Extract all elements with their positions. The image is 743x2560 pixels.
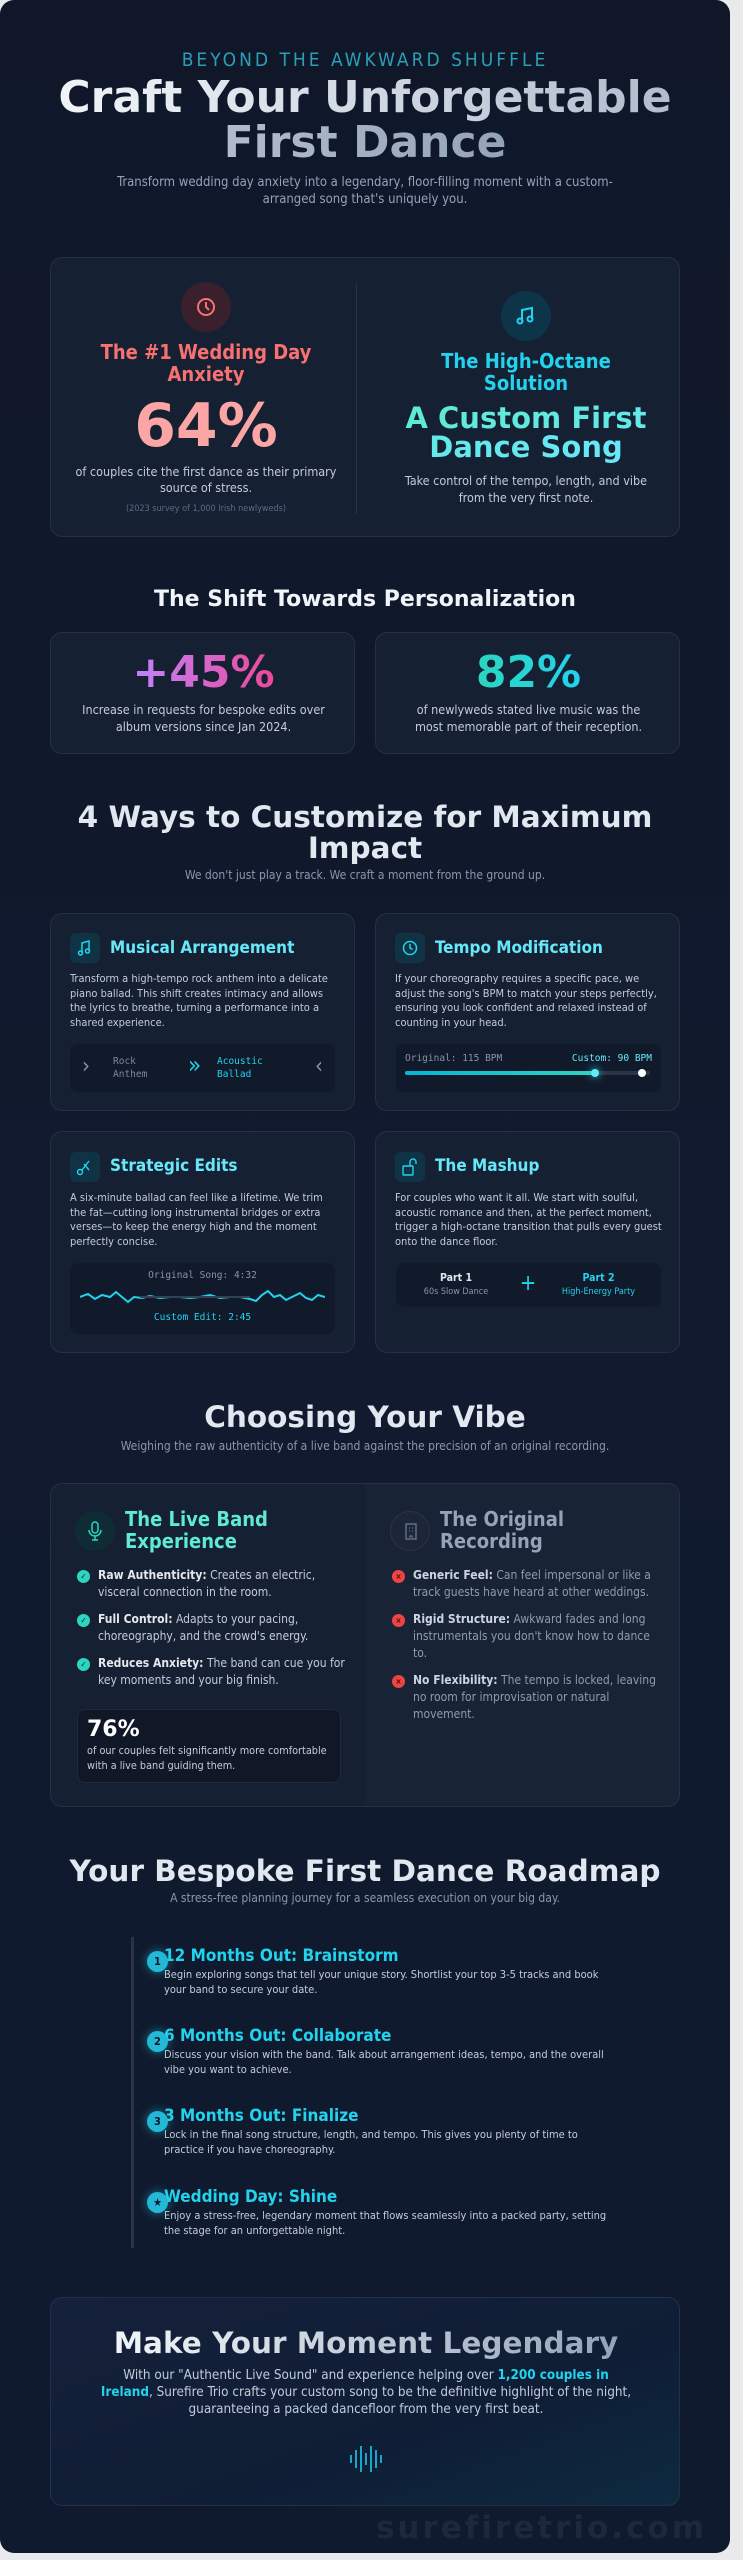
timeline: 1 <box>154 1955 161 1968</box>
stat card: 82%: 82% <box>476 647 581 698</box>
icon: microphone <box>75 1511 115 1551</box>
list: recording cons <box>392 1568 656 1721</box>
subheading: roadmap: A stress-free planning journey for a seamless execution on your big day. <box>170 1891 560 1905</box>
text: stress <box>76 464 336 495</box>
card: strategic edits: A six-minute ballad can feel like a lifetime. We trim the fat—cutting long instrumental bridges or extra verses—to keep the energy high and the moment perfectly concise. <box>70 1191 323 1248</box>
heading: vibe: Choosing Your Vibe <box>204 1400 526 1434</box>
icon: clock <box>181 282 231 332</box>
panel: vibe comparison: Rigid Structure: Awkward fades and long instrumentals you don't know how to dance to. <box>413 1612 650 1660</box>
icon: building <box>390 1511 430 1551</box>
heading: original recording: Recording <box>440 1529 543 1553</box>
step 1: 12 Months Out: Brainstorm <box>164 1946 399 1966</box>
panel: vibe comparison: × <box>395 1616 402 1625</box>
step 2: Discuss your vision with the band. Talk about arrangement ideas, tempo, and the overall vibe you want to achieve. <box>164 2048 604 2076</box>
text: cta <box>101 2368 631 2417</box>
eyebrow: BEYOND THE AWKWARD SHUFFLE <box>182 49 548 71</box>
list: live band pros <box>77 1568 345 1687</box>
card: musical arrangement: Transform a high-tempo rock anthem into a delicate piano ballad. This shift creates intimacy and allows the lyrics to breathe, turning a performance into a shared experience. <box>70 972 328 1029</box>
demo: rock to ballad <box>70 1044 335 1092</box>
demo: rock to ballad: › <box>82 1054 90 1079</box>
heading: solution <box>441 349 611 395</box>
heading: 4 ways <box>78 800 652 865</box>
text: cta: With our "Authentic Live Sound" and experience helping over 1,200 couples in <box>123 2368 609 2383</box>
text: stress: of couples cite the first dance as their primary <box>76 464 336 479</box>
stat card: +45%: +45% <box>132 647 275 698</box>
demo: waveform: Custom Edit: 2:45 <box>154 1312 251 1323</box>
demo: part1 + part2: Part 2 <box>582 1272 615 1284</box>
heading: shift: The Shift Towards Personalization <box>154 587 576 612</box>
heading: solution: The High-Octane <box>441 349 611 373</box>
demo: rock to ballad: ‹ <box>315 1054 323 1079</box>
step 1: Begin exploring songs that tell your unique story. Shortlist your top 3-5 tracks and book your band to secure your date. <box>164 1968 598 1996</box>
panel: vibe comparison: Raw Authenticity: Creates an electric, visceral connection in the room. <box>98 1568 315 1599</box>
timeline <box>131 1937 606 2248</box>
timeline: 3 <box>154 2115 161 2128</box>
panel: vibe comparison: Full Control: Adapts to your pacing, choreography, and the crowd's energy. <box>98 1612 308 1643</box>
step 3: Lock in the final song structure, length, and tempo. This gives you plenty of time to practice if you have choreography. <box>164 2128 578 2156</box>
timeline: ★ <box>153 2196 162 2209</box>
heading: original recording: The Original <box>440 1507 564 1531</box>
demo: rock to ballad: » <box>188 1051 201 1079</box>
heading: anxiety <box>100 340 311 386</box>
callout: 76%: of our couples felt significantly more comfortable with a live band guiding them. <box>87 1744 327 1772</box>
big text: custom song <box>405 401 646 464</box>
stat card: 82% <box>375 632 680 754</box>
panel: vibe comparison: No Flexibility: The tempo is locked, leaving no room for improvisation or natural movement. <box>413 1673 656 1721</box>
panel: vibe comparison: Generic Feel: Can feel impersonal or like a track guests have heard at other weddings. <box>413 1568 651 1599</box>
panel: vibe comparison <box>50 1483 680 1807</box>
icon: scissors <box>70 1152 100 1182</box>
heading: live band: The Live Band <box>125 1507 268 1531</box>
demo: rock to ballad: Rock <box>113 1056 136 1067</box>
step 4 <box>164 2187 606 2237</box>
timeline: 2 <box>154 2035 161 2048</box>
heading: anxiety: Anxiety <box>167 362 245 386</box>
step 1 <box>164 1946 598 1996</box>
heading: solution: Solution <box>484 371 568 395</box>
subheading: 4 ways: We don't just play a track. We craft a moment from the ground up. <box>185 868 545 882</box>
stat card: +45%: Increase in requests for bespoke edits over <box>82 702 325 717</box>
demo: part1 + part2: + <box>520 1271 536 1296</box>
text: take control: from the very first note. <box>459 490 593 505</box>
subheading: vibe: Weighing the raw authenticity of a live band against the precision of an original recording. <box>121 1439 609 1453</box>
callout: 76% <box>77 1709 341 1783</box>
demo: bpm slider: Custom: 90 BPM <box>572 1053 652 1064</box>
demo: bpm slider: Original: 115 BPM <box>405 1053 502 1064</box>
panel: vibe comparison: ✓ <box>80 1660 87 1669</box>
subtitle <box>117 175 613 207</box>
icon: music note <box>501 291 551 341</box>
demo: waveform: Original Song: 4:32 <box>148 1270 257 1281</box>
demo: part1 + part2 <box>396 1263 661 1307</box>
heading: roadmap: Your Bespoke First Dance Roadmap <box>70 1854 660 1888</box>
heading: live band <box>125 1507 268 1553</box>
big text: custom song: Dance Song <box>429 430 623 464</box>
demo: part1 + part2: 60s Slow Dance <box>424 1287 488 1297</box>
heading: 4 ways: Impact <box>308 831 422 865</box>
stat card: 82%: most memorable part of their reception. <box>415 719 642 734</box>
card: musical arrangement <box>50 913 355 1111</box>
big text: custom song: A Custom First <box>405 401 646 435</box>
subtitle: arranged song that's uniquely you. <box>263 192 467 207</box>
icon: clock <box>395 933 425 963</box>
panel: hero comparison <box>50 257 680 537</box>
source: (2023 survey of 1,000 Irish newlyweds) <box>126 504 286 514</box>
demo: rock to ballad: Acoustic <box>217 1056 263 1067</box>
icon: lock <box>395 1152 425 1182</box>
text: take control: Take control of the tempo, length, and vibe <box>405 473 647 488</box>
demo: rock to ballad: Anthem <box>113 1069 147 1080</box>
step 4: Wedding Day: Shine <box>164 2187 337 2207</box>
panel: vibe comparison: × <box>395 1572 402 1581</box>
stat card: +45%: album versions since Jan 2024. <box>116 719 291 734</box>
demo: part1 + part2: Part 1 <box>440 1272 472 1284</box>
demo: bpm slider <box>396 1044 661 1092</box>
icon: sound wave <box>350 2446 382 2472</box>
title: Craft Your Unforgettable <box>58 72 672 123</box>
card: strategic edits: Strategic Edits <box>110 1156 238 1176</box>
step 4: Enjoy a stress-free, legendary moment that flows seamlessly into a packed party, setting the stage for an unforgettable night. <box>164 2209 606 2237</box>
card: tempo: Tempo Modification <box>435 938 603 958</box>
heading: original recording <box>440 1507 564 1553</box>
text: cta: guaranteeing a packed dancefloor from the very first beat. <box>189 2402 543 2417</box>
step 3: 3 Months Out: Finalize <box>164 2106 359 2126</box>
card: tempo: If your choreography requires a specific pace, we adjust the song's BPM to match your steps perfectly, ensuring you look confident and relaxed instead of counting in your head. <box>395 972 657 1029</box>
stat: 64%: 64% <box>134 391 278 461</box>
panel: final CTA <box>50 2297 680 2506</box>
step 2: 6 Months Out: Collaborate <box>164 2026 391 2046</box>
card: mashup <box>375 1131 680 1353</box>
heading: anxiety: The #1 Wedding Day <box>101 340 311 364</box>
card: mashup: For couples who want it all. We start with soulful, acoustic romance and then, at the perfect moment, trigger a high-octane transition that pulls every guest onto the dance floor. <box>395 1191 662 1248</box>
panel: vibe comparison: ✓ <box>80 1572 87 1581</box>
title: First Dance <box>224 117 506 168</box>
callout: 76%: 76% <box>87 1717 140 1742</box>
card: tempo <box>375 913 680 1111</box>
demo: rock to ballad: Ballad <box>217 1069 251 1080</box>
subtitle: Transform wedding day anxiety into a legendary, floor-filling moment with a custom- <box>117 175 613 190</box>
demo: part1 + part2: High-Energy Party <box>562 1287 635 1297</box>
step 3 <box>164 2106 578 2156</box>
heading: live band: Experience <box>125 1529 237 1553</box>
stat card: +45% <box>50 632 355 754</box>
heading: legendary: Make Your Moment Legendary <box>114 2326 618 2360</box>
step 2 <box>164 2026 604 2076</box>
panel: vibe comparison: Reduces Anxiety: The band can cue you for key moments and your big finish. <box>98 1656 345 1687</box>
demo: waveform <box>70 1263 335 1334</box>
heading: 4 ways: 4 Ways to Customize for Maximum <box>78 800 652 834</box>
title <box>58 72 672 168</box>
card: musical arrangement: Musical Arrangement <box>110 938 294 958</box>
text: stress: source of stress. <box>160 480 252 495</box>
watermark: surefiretrio.com <box>376 2510 707 2546</box>
panel: vibe comparison: ✓ <box>80 1616 87 1625</box>
stat card: 82%: of newlyweds stated live music was the <box>417 702 640 717</box>
text: take control <box>404 473 647 505</box>
card: strategic edits <box>50 1131 355 1353</box>
panel: vibe comparison: × <box>395 1677 402 1686</box>
card: mashup: The Mashup <box>435 1156 539 1176</box>
icon: note <box>70 933 100 963</box>
text: cta: Ireland, Surefire Trio crafts your custom song to be the definitive highlight of the night, <box>101 2385 631 2400</box>
